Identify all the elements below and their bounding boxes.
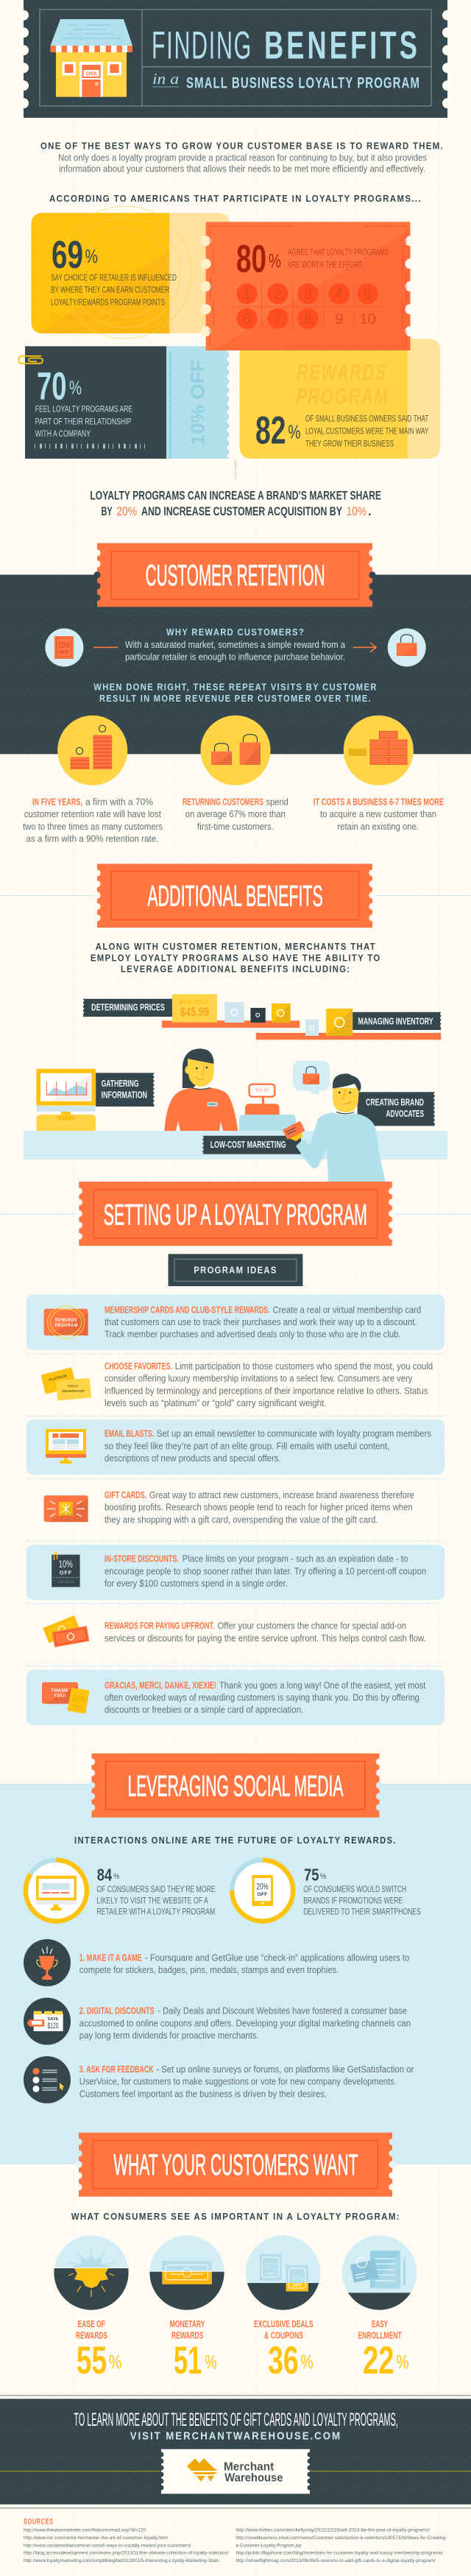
panel: thank you: often overlooked ways of rewarding customers is saying thank you. Do this by offering: [105, 1692, 419, 1703]
stat: 75 percent: OF CONSUMERS WOULD SWITCH: [303, 1884, 406, 1894]
item: make it a game: compete for stickers, badges, pins, medals, stamps and even trophies.: [79, 1964, 339, 1975]
panel: membership cards: Track member purchases and advertised deals only to those who are in the club.: [105, 1329, 400, 1340]
stat: 84 percent: OF CONSUMERS SAID THEY’RE MORE: [96, 1884, 216, 1894]
icon: platinum and gold cards: MEMBERSHIP: [62, 1389, 85, 1393]
sources: http://www.socialmediaexaminer.com/6-ways-to-socially-reward-your-customers/: [24, 2543, 191, 2548]
stat: 75 percent: DELIVERED TO THEIR SMARTPHONES: [303, 1907, 421, 1917]
price sign: [172, 994, 217, 1023]
chart: 84 percent ring: [26, 1860, 87, 1922]
banner: additional benefits: ADDITIONAL BENEFITS: [147, 881, 323, 913]
icon: smartphone: OFF: [258, 1892, 268, 1897]
panel: email blasts: EMAIL BLASTS.: [105, 1428, 154, 1439]
stat: 84 percent: RETAILER WITH A LOYALTY PROGRAM: [96, 1907, 215, 1917]
icon: rewards card: [44, 1306, 88, 1338]
illustration: store shelves: [83, 994, 441, 1040]
panel: 80 percent orange punch card: AGREE THAT LOYALTY PROGRAMS: [288, 247, 389, 258]
tag: creating brand advocates: ADVOCATES: [386, 1109, 424, 1119]
program ideas label: [169, 1254, 302, 1286]
punch card grid: 10: [359, 311, 376, 328]
panel: thank you: discounts or freebies or a simple card of appreciation.: [105, 1704, 303, 1715]
market share statement: AND INCREASE CUSTOMER ACQUISITION BY: [141, 504, 342, 518]
stat: ease of rewards: %: [109, 2351, 121, 2373]
text block: acquisition cost: retain an existing one.: [337, 821, 419, 832]
panel: 82 percent rewards card: THEY GROW THEIR BUSINESS: [305, 438, 394, 448]
panel: email blasts: descriptions of new products and special offers.: [105, 1453, 281, 1464]
panel: membership cards: [26, 1294, 445, 1350]
text block: five years: [23, 796, 163, 844]
repeat visits statement: RESULT IN MORE REVENUE PER CUSTOMER OVER TIME.: [99, 693, 372, 704]
panel: 70 percent dark coupon: 70: [37, 364, 67, 408]
panel: thank you: GRACIAS, MERCI, DANKE, XIEXIE!: [105, 1679, 216, 1690]
panel: 80 percent orange punch card: %: [269, 250, 281, 272]
sources: a-Customer-Loyalty-Program.jsp: [236, 2543, 302, 2548]
item: digital discounts: accustomed to online coupons and offers. Developing your digital marketing channels can: [79, 2017, 411, 2028]
icon: exclusive coupons: 30%: [292, 2273, 302, 2283]
sources: http://blog.accessdevelopment.com/index.php/2013/11/the-ultimate-collection-of-loyalty-statistics/: [24, 2551, 228, 2556]
icon: coupon circle: OFF: [59, 651, 69, 655]
intro text: [40, 141, 444, 174]
market share statement: 10%: [347, 504, 366, 518]
text block: five years: a firm with a 70%: [85, 796, 153, 807]
icon: coupon circle: 10%: [58, 641, 70, 650]
panel: gift cards: boosting profits. Research shows people tend to reach for higher priced items when: [105, 1502, 413, 1513]
icon: exclusive coupons: GET 2: [264, 2261, 277, 2272]
why reward customers text: With a saturated market, sometimes a simple reward from a: [125, 639, 346, 650]
market share statement: .: [368, 504, 372, 518]
panel: 70 percent dark coupon: WITH A COMPANY: [35, 428, 91, 439]
panel: 82 percent rewards card: PROGRAM: [296, 383, 389, 409]
icon: rewards card: PROGRAM: [54, 1324, 78, 1328]
illustration: computer monitor: [36, 1069, 96, 1131]
text block: returning customers: first-time customers.: [197, 821, 274, 832]
illustration: cash register: $45.99: [255, 1088, 269, 1093]
stat: exclusive deals: & COUPONS: [264, 2329, 303, 2340]
arrow: [93, 643, 376, 652]
tag: determining prices: [83, 999, 172, 1017]
logo ticket: Warehouse: [224, 2471, 283, 2484]
icon: rewards card: REWARDS: [55, 1319, 77, 1323]
panel: choose favorites: CHOOSE FAVORITES.: [105, 1361, 172, 1372]
panel: 82 percent rewards card: REWARDS: [297, 359, 387, 385]
icon: smartphone: 20%: [256, 1882, 269, 1892]
additional benefits intro: [91, 941, 381, 975]
sources: http://streetfightmag.com/2013/06/06/5-reasons-to-add-gift-cards-to-a-digital-loyalty-program/: [236, 2558, 436, 2563]
title: FINDING: [152, 24, 252, 67]
header ticket: [18, 0, 453, 118]
item: ask for feedback: Customers feel important as the business is driven by their desires.: [79, 2088, 327, 2099]
punch card grid: 7: [274, 311, 282, 328]
stat: 84 percent: LIKELY TO VISIT THE WEBSITE OF A: [96, 1895, 209, 1905]
panel: in-store discounts: encourage people to shop sooner rather than later. Try offering a 10 percent-off coupon: [105, 1565, 426, 1576]
chart: 75 percent ring: [232, 1860, 293, 1922]
tag: managing inventory: MANAGING INVENTORY: [358, 1016, 433, 1026]
sources: http://www.thewisemarketer.com/features/read.asp?id=120: [24, 2528, 146, 2533]
stat: 84 percent: [96, 1865, 216, 1917]
panel: 69 percent yellow card: 69: [52, 233, 83, 277]
text block: returning customers: RETURNING CUSTOMERS: [183, 796, 263, 807]
stat: ease of rewards: EASE OF: [78, 2318, 105, 2329]
panel: gift cards: they are shopping with a gift card, overspending the value of the gift card.: [105, 1514, 378, 1525]
repeat visits statement: [93, 682, 378, 704]
panel: footer call to action: [0, 2399, 471, 2505]
text block: returning customers: [183, 796, 288, 832]
item: make it a game: - Foursquare and GetGlue use “check-in” applications allowing users to: [145, 1952, 409, 1963]
panel: 69 percent yellow card: [31, 206, 230, 339]
item: make it a game: [24, 1939, 409, 1986]
stat: exclusive deals: %: [301, 2351, 314, 2373]
panel: 70 percent dark coupon: PART OF THEIR RELATIONSHIP: [35, 416, 131, 426]
icon: smartphone: [252, 1875, 273, 1906]
panel: gift cards: Great way to attract new customers, increase brand awareness therefore: [149, 1489, 414, 1500]
item: ask for feedback: 3. ASK FOR FEEDBACK: [79, 2064, 154, 2075]
icon: coupon tag: $120: [47, 2022, 59, 2030]
stat: 75 percent: 75: [304, 1865, 319, 1884]
stat: ease of rewards: [76, 2318, 121, 2382]
tag: managing inventory: [353, 1012, 441, 1030]
logo mark: [187, 2458, 218, 2482]
text block: five years: IN FIVE YEARS,: [32, 796, 82, 807]
text block: acquisition cost: to acquire a new customer than: [320, 808, 436, 819]
stat: monetary rewards: MONETARY: [170, 2318, 205, 2329]
icon: platinum and gold cards: PLATINUM: [49, 1374, 68, 1383]
stat: ease of rewards: REWARDS: [76, 2329, 107, 2340]
panel: choose favorites: [40, 1361, 433, 1408]
subtitle: [152, 70, 420, 91]
why reward customers text: [125, 627, 346, 663]
panel: membership cards: MEMBERSHIP CARDS AND CLUB-STYLE REWARDS.: [105, 1304, 269, 1315]
icon: coupon tag: SAVE: [47, 2017, 59, 2022]
subtitle: in a: [152, 70, 179, 88]
punch card grid: 1: [243, 286, 251, 303]
sources: http://public.ifbyphone.com/blog/incentives-for-customer-loyalty-and-luxury-membership-programs/: [236, 2551, 443, 2556]
icon: two tickets: [43, 1615, 89, 1648]
icon: coupon tag: [24, 1998, 71, 2045]
logo ticket: [159, 2449, 312, 2494]
panel: 70 percent dark coupon: %: [69, 377, 82, 399]
text block: five years: as a firm with a 90% retention rate.: [26, 833, 159, 844]
what consumers heading: WHAT CONSUMERS SEE AS IMPORTANT IN A LOYALTY PROGRAM:: [71, 2211, 400, 2222]
social media intro: INTERACTIONS ONLINE ARE THE FUTURE OF LOYALTY REWARDS.: [74, 1835, 397, 1846]
tag: creating brand advocates: [358, 1092, 435, 1126]
banner: what your customers want: [75, 2133, 396, 2197]
panel: 70 percent dark coupon: [19, 346, 230, 459]
logo ticket: Merchant: [224, 2461, 275, 2474]
tag: low-cost marketing: LOW-COST MARKETING: [210, 1140, 286, 1150]
banner: leveraging social media: [88, 1754, 383, 1818]
panel: 70 percent dark coupon: 10% OFF: [187, 359, 209, 445]
icon: platinum and gold cards: [40, 1367, 91, 1400]
price sign: $45.99: [180, 1005, 209, 1019]
illustration: cashier: [164, 1048, 238, 1131]
icon: dark coupon: EXP 06-30: [58, 1580, 74, 1584]
repeat visits statement: WHEN DONE RIGHT, THESE REPEAT VISITS BY CUSTOMER: [93, 682, 378, 693]
stat: 84 percent: %: [113, 1872, 120, 1881]
why reward customers text: particular retailer is enough to influence purchase behavior.: [125, 652, 345, 663]
counter: [24, 1131, 447, 1160]
panel: choose favorites: Limit participation to those customers who spend the most, you could: [175, 1361, 433, 1372]
panel: 82 percent rewards card: %: [288, 421, 301, 443]
intro text: information about your customers that allows their needs to be met more efficiently and effectively.: [59, 163, 425, 174]
market share statement: BY: [102, 504, 113, 518]
stat: exclusive deals: [254, 2318, 314, 2382]
stat: monetary rewards: [170, 2318, 217, 2382]
stat: exclusive deals: EXCLUSIVE DEALS: [254, 2318, 314, 2329]
icon: email monitor: [46, 1429, 86, 1464]
illustration: cash register: [239, 1084, 296, 1131]
icon: paperclip: [19, 356, 43, 364]
panel: membership cards: Create a real or virtual membership card: [273, 1304, 421, 1315]
stat: easy enrollment: [358, 2318, 409, 2382]
panel: 69 percent yellow card: LOYALTY/REWARDS PROGRAM POINTS: [51, 297, 165, 308]
icon: coupon circle: [45, 629, 83, 667]
stat: 84 percent: 84: [97, 1865, 112, 1884]
banner: additional benefits: [93, 864, 376, 928]
sources: http://www.loyaltymarketing.com/simplilblog/bid/313901/5-Interesting-Loyalty-Marketing-Stats: [24, 2558, 219, 2563]
icon: ease of rewards burst: [54, 2235, 129, 2310]
text block: acquisition cost: [314, 796, 444, 832]
icon: thank you card: THANK: [52, 1688, 69, 1693]
icon: monetary rewards bill: [149, 2235, 224, 2310]
panel: 70 percent dark coupon: FEEL LOYALTY PROGRAMS ARE: [35, 403, 132, 414]
why reward customers text: WHY REWARD CUSTOMERS?: [166, 627, 305, 638]
icon: exclusive coupons: FREE: [265, 2272, 277, 2276]
stat: ease of rewards: 55: [77, 2339, 107, 2382]
program ideas label: PROGRAM IDEAS: [194, 1264, 277, 1275]
intro text: Not only does a loyalty program provide a practical reason for continuing to buy, but it also provides: [58, 152, 427, 163]
icon: shopping bag circle: [388, 629, 426, 667]
icon: exclusive coupons: OFF: [293, 2284, 302, 2288]
tag: gathering information: GATHERING: [102, 1079, 139, 1089]
icon: website monitor: [36, 1876, 77, 1910]
item: digital discounts: - Daily Deals and Discount Websites have fostered a consumer base: [157, 2005, 407, 2016]
panel: choose favorites: consider offering luxury membership invitations to a select few. Consumers are very: [105, 1373, 413, 1384]
panel: 69 percent yellow card: 3217821 706 349 298: [51, 312, 124, 322]
icon: thank you card: OFF: [72, 1704, 82, 1710]
sources: http://www.forbes.com/sites/kellyclay/2012/12/15/will-2013-be-the-year-of-loyalty-programs/: [236, 2528, 430, 2533]
title: [152, 24, 420, 67]
stats heading: ACCORDING TO AMERICANS THAT PARTICIPATE IN LOYALTY PROGRAMS...: [49, 193, 422, 204]
text block: five years: two to three times as many customers: [23, 821, 163, 832]
panel: footer call to action: VISIT MERCHANTWAREHOUSE.COM: [130, 2430, 341, 2443]
panel: choose favorites: levels such as “platinum” or “gold” carry significant weight.: [105, 1397, 327, 1408]
price sign: NOW ONLY: [180, 1000, 209, 1005]
icon: storefront house: OPEN: [85, 72, 97, 77]
item: digital discounts: 2. DIGITAL DISCOUNTS: [79, 2005, 155, 2016]
icon: gift card: [44, 1495, 88, 1522]
icon: thank you card: 20%: [71, 1694, 85, 1704]
market share statement: 20%: [116, 504, 137, 518]
stat: 75 percent: BRANDS IF PROMOTIONS WERE: [303, 1895, 403, 1905]
icon: easy enrollment form: [342, 2235, 417, 2310]
banner: setting up a loyalty program: [76, 1182, 395, 1246]
banner: customer retention: [93, 543, 376, 607]
panel: paying upfront: REWARDS FOR PAYING UPFRONT.: [105, 1620, 214, 1631]
icon: dark coupon: [52, 1553, 80, 1587]
punch card grid: 9: [335, 311, 343, 328]
icon: stacked gold bricks: [344, 716, 414, 786]
tag: gathering information: [96, 1073, 154, 1107]
panel: email blasts: [26, 1419, 445, 1475]
panel: gift cards: [44, 1489, 414, 1525]
additional benefits intro: ALONG WITH CUSTOMER RETENTION, MERCHANTS THAT: [96, 941, 376, 952]
icon: dark coupon: 10%: [59, 1558, 73, 1570]
panel: 82 percent rewards card: 82: [255, 409, 286, 453]
sources: [24, 2517, 447, 2563]
panel: 80 percent orange punch card: ARE WORTH THE EFFORT: [288, 259, 362, 269]
panel: paying upfront: Offer your customers the chance for special add-on: [218, 1620, 406, 1631]
text block: returning customers: spend: [266, 796, 288, 807]
tag: determining prices: DETERMINING PRICES: [91, 1003, 165, 1013]
punch card grid: 6: [243, 311, 251, 328]
panel: thank you: Thank you goes a long way! One of the easiest, yet most: [219, 1679, 426, 1690]
punch card grid: 5: [364, 286, 372, 303]
item: make it a game: 1. MAKE IT A GAME: [79, 1952, 142, 1963]
stat: monetary rewards: %: [205, 2351, 217, 2373]
stat: easy enrollment: %: [396, 2351, 409, 2373]
punch card grid: 8: [304, 311, 312, 328]
panel: paying upfront: [43, 1615, 426, 1648]
stat: 75 percent: [303, 1865, 421, 1917]
icon: storefront house: [50, 19, 132, 97]
punch card grid: 2: [274, 286, 282, 303]
panel: 82 percent rewards card: [240, 339, 440, 459]
text block: five years: customer retention rate will have lost: [24, 808, 161, 819]
icon: trophy: [24, 1939, 71, 1986]
panel: in-store discounts: Place limits on your program - such as an expiration date - to: [183, 1553, 408, 1564]
item: ask for feedback: [24, 2056, 414, 2103]
panel: email blasts: so they feel like they’re part of an elite group. Fill emails with useful content,: [105, 1440, 389, 1451]
punch card grid: [232, 283, 384, 329]
item: digital discounts: pay long term dividends for proactive merchants.: [79, 2030, 259, 2041]
panel: email blasts: Set up an email newsletter to communicate with loyalty program members: [157, 1428, 431, 1439]
icon: two shopping bags: [200, 716, 271, 786]
panel: thank you: [26, 1670, 445, 1725]
icon: exclusive coupons: [246, 2235, 320, 2310]
additional benefits intro: LEVERAGE ADDITIONAL BENEFITS INCLUDING:: [121, 964, 350, 975]
panel: customer retention dark band: [0, 543, 471, 754]
icon: growing coin stacks: [57, 716, 127, 786]
panel: in-store discounts: for every $100 customers spend in a single order.: [105, 1578, 288, 1589]
punch card grid: 4: [335, 286, 343, 303]
stat: monetary rewards: REWARDS: [171, 2329, 204, 2340]
item: digital discounts: [24, 1998, 411, 2045]
speech bubble with bag: [293, 1061, 330, 1095]
icon: platinum and gold cards: GOLD: [68, 1384, 79, 1388]
sources: SOURCES: [24, 2517, 54, 2526]
punch card grid: 3: [304, 286, 312, 303]
panel: 69 percent yellow card: SAY CHOICE OF RETAILER IS INFLUENCED: [51, 272, 177, 283]
tag: low-cost marketing: [203, 1136, 301, 1154]
sources: http://smallbusiness.intuit.com/news/Customer-satisfaction-&-retention/19057329/Ideas-for-Creating-: [236, 2536, 447, 2541]
icon: thank you card: [42, 1682, 90, 1714]
additional benefits intro: EMPLOY LOYALTY PROGRAMS ALSO HAVE THE ABILITY TO: [91, 952, 381, 963]
stat: easy enrollment: ENROLLMENT: [358, 2329, 402, 2340]
panel: in-store discounts: IN-STORE DISCOUNTS.: [105, 1553, 179, 1564]
panel: 80 percent orange punch card: [201, 222, 415, 350]
panel: 69 percent yellow card: BY WHERE THEY CAN EARN CUSTOMER: [51, 285, 169, 295]
item: ask for feedback: UserVoice, for customers to make suggestions or vote for new company developments.: [79, 2076, 397, 2087]
panel: 80 percent orange punch card: 80: [236, 237, 266, 280]
stat: 75 percent: %: [320, 1872, 326, 1881]
text block: returning customers: on average 67% more than: [185, 808, 286, 819]
tag: gathering information: INFORMATION: [102, 1090, 147, 1100]
panel: membership cards: that customers can use to track their purchases and work their way up to a discount.: [105, 1316, 417, 1327]
stat: easy enrollment: EASY: [372, 2318, 388, 2329]
panel: 69 percent yellow card: %: [85, 245, 98, 267]
panel: in-store discounts: [26, 1545, 445, 1600]
stat: easy enrollment: 22: [363, 2339, 394, 2382]
tag: creating brand advocates: CREATING BRAND: [366, 1098, 424, 1108]
panel: leveraging social media section: [0, 1754, 471, 2164]
panel: paying upfront: services or discounts for paying the entire service upfront. This helps control cash flow.: [105, 1632, 426, 1643]
illustration: customer: [283, 1073, 386, 1182]
stat: monetary rewards: 51: [174, 2339, 202, 2382]
icon: dark coupon: OFF: [60, 1570, 72, 1575]
panel: choose favorites: influenced by terminology and perceptions of their importance relative to others. Status: [105, 1385, 428, 1396]
icon: thank you card: YOU!: [54, 1693, 66, 1698]
market share statement: [90, 488, 381, 518]
stat: exclusive deals: 36: [268, 2339, 299, 2382]
icon: survey list: [24, 2056, 71, 2103]
panel: gift cards: GIFT CARDS.: [105, 1489, 146, 1500]
sources: http://www.inc.com/victor-ho/master-the-art-of-customer-loyalty.html: [24, 2536, 168, 2541]
item: ask for feedback: - Set up online surveys or forums, on platforms like GetSatisfaction or: [156, 2064, 414, 2075]
